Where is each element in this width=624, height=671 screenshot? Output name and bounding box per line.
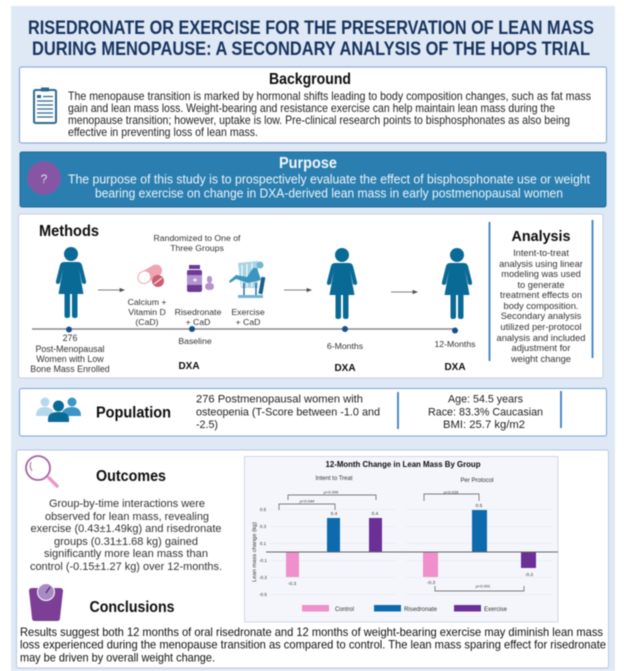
text: timepoint labels: Baseline: [178, 336, 212, 346]
text: population demographics: Race: 83.3% Caucasian: [428, 406, 543, 418]
text: enrolment label: Bone Mass Enrolled: [30, 364, 110, 374]
text: conclusions body: Results suggest both 12 months of oral risedronate and 12 months of weight-bearing exercise may diminish lean mass: [20, 625, 603, 639]
chart legend: Exercise: [484, 607, 508, 613]
arrow: enrolment to randomisation: [98, 288, 124, 292]
arrow: six to twelve months: [391, 290, 417, 294]
text: conclusions body: loss experienced during the menopause transition as compared to control. The lean mass sparing effect for risedronate: [20, 638, 606, 652]
text: group labels: (CaD): [135, 317, 159, 327]
text: analysis body: Intent-to-treat: [513, 248, 569, 258]
text: timepoint labels: 6-Months: [327, 341, 364, 351]
text: analysis body: analysis and included: [497, 333, 585, 343]
text: analysis body: body composition.: [504, 301, 578, 311]
bars: intent to treat: [286, 518, 382, 577]
text: group labels: Calcium +: [128, 297, 166, 307]
icon: woman enrolled: [56, 247, 86, 318]
chart legend: Risedronate: [404, 607, 438, 613]
icon: clipboard: [34, 88, 56, 123]
text: background body: [68, 89, 591, 139]
text: group labels: Risedronate: [175, 307, 222, 317]
icon: weighing scale: [29, 584, 63, 621]
text: analysis body: adjustment for: [512, 343, 570, 353]
panel: population: [20, 388, 606, 436]
text: background body: gain and lean mass loss. Weight-bearing and resistance exercise can help maintain lean mass during the: [68, 101, 555, 115]
text: timepoint labels: 12-Months: [434, 339, 476, 349]
text: enrolment label: Post-Menopausal: [35, 344, 105, 354]
text: analysis body: Secondary analysis: [501, 311, 582, 321]
significance brackets: [279, 494, 524, 591]
text: outcomes body: [30, 498, 222, 573]
text: randomized: [154, 233, 241, 253]
text: timepoint labels: DXA: [178, 361, 200, 372]
icon: woman at six months: [327, 248, 357, 319]
p values: p=0.006: [323, 490, 339, 494]
text: population demographics: BMI: 25.7 kg/m2: [443, 419, 525, 431]
text: analysis body: weight change: [510, 354, 571, 364]
text: analysis body: treatment effects on: [500, 290, 582, 300]
panel: background: [20, 67, 606, 143]
bar value labels: 0.4: [331, 511, 338, 517]
bar value labels: -0.3: [288, 581, 296, 587]
text: timepoint labels: DXA: [334, 363, 356, 374]
timeline: [32, 326, 458, 334]
chart legend: [302, 605, 508, 613]
text: outcomes body: control (-0.15±1.27 kg) over 12-months.: [30, 561, 222, 573]
text: group labels: + CaD: [186, 317, 210, 327]
heading: outcomes: Outcomes: [96, 468, 166, 485]
arrow: randomisation to six months: [284, 288, 311, 292]
text: group labels: Exercise: [231, 307, 265, 317]
panel: outcomes and conclusions: [16, 450, 608, 668]
text: population demographics: Age: 54.5 years: [448, 394, 523, 406]
text: analysis body: modeling was used: [501, 269, 581, 279]
text: purpose body: [68, 172, 590, 200]
text: analysis body: utilized per-protocol: [500, 322, 582, 332]
icon: question mark circle: [27, 161, 61, 195]
title: [28, 18, 594, 60]
chart subtitles: [315, 476, 494, 484]
y axis tick labels: [259, 507, 267, 597]
y axis tick labels: 0.1: [260, 541, 267, 546]
text: analysis body: [497, 248, 585, 364]
bar value labels: 0.4: [372, 511, 379, 517]
bars: per protocol: [423, 510, 536, 577]
y axis tick labels: -0.3: [259, 575, 267, 580]
text: population description: 276 Postmenopausal women with: [196, 394, 363, 406]
chart legend: Control: [335, 607, 354, 613]
panel: purpose: [20, 152, 606, 207]
text: enrolment label: Women with Low: [36, 354, 104, 364]
heading: methods: Methods: [39, 223, 99, 240]
text: outcomes body: groups (0.31±1.68 kg) gained: [54, 536, 198, 548]
heading: background: Background: [269, 71, 351, 88]
text: enrolment label: [30, 333, 110, 374]
text: background body: menopause transition; however, uptake is low. Pre-clinical research points to bisphosphonates as also being: [68, 113, 570, 127]
icon: people group: [36, 398, 81, 422]
icon: question mark circle: ?: [41, 172, 48, 186]
icon: woman at twelve months: [442, 248, 472, 319]
text: conclusions body: [20, 625, 606, 664]
bar value labels: 0.5: [476, 503, 483, 509]
bar value labels: -0.3: [427, 580, 435, 586]
text: outcomes body: Group-by-time interactions were: [49, 498, 205, 510]
chart title: 12-Month Change in Lean Mass By Group: [326, 459, 480, 469]
text: outcomes body: observed for lean mass, revealing: [45, 511, 209, 523]
text: population description: [196, 394, 380, 431]
y axis tick labels: 0.5: [260, 507, 267, 512]
heading: population: Population: [96, 404, 171, 422]
p values: [299, 490, 490, 588]
text: purpose body: bearing exercise on change in DXA-derived lean mass in early postmenopausal women: [95, 186, 563, 200]
heading: analysis: Analysis: [512, 229, 570, 245]
text: group labels: + CaD: [236, 317, 260, 327]
text: conclusions body: may be driven by overall weight change.: [20, 650, 215, 664]
text: group labels: Vitamin D: [128, 307, 166, 317]
y axis tick labels: -0.5: [259, 592, 267, 597]
text: randomized: Randomized to One of: [154, 233, 241, 243]
text: timepoint labels: DXA: [444, 362, 466, 373]
heading: conclusions: Conclusions: [90, 599, 174, 616]
y axis label: Lean mass change (kg): [252, 522, 258, 582]
chart subtitles: Per Protocol: [460, 478, 494, 484]
heading: purpose: Purpose: [279, 155, 337, 172]
text: analysis body: to generate: [517, 280, 565, 290]
p values: p=0.018: [443, 490, 459, 494]
text: analysis body: analysis using linear: [499, 259, 583, 269]
y axis tick labels: 0.3: [260, 524, 267, 529]
text: timepoint labels: [178, 336, 476, 374]
text: background body: effective in preventing loss of lean mass.: [68, 125, 258, 139]
text: randomized: Three Groups: [170, 243, 224, 253]
text: group labels: [128, 297, 265, 327]
icon: risedronate bottle: [187, 265, 214, 292]
divider lines: analysis: [490, 220, 592, 361]
text: purpose body: The purpose of this study is to prospectively evaluate the effect of bisphosphonate use or weight: [68, 172, 590, 186]
icon: calcium pill: [136, 262, 164, 287]
text: population demographics: [428, 394, 543, 431]
p values: p=0.044: [299, 498, 315, 504]
icon: exercise machine: [229, 261, 265, 298]
bar chart: [244, 456, 558, 622]
divider lines: population: [398, 391, 561, 429]
y axis tick labels: -0.1: [259, 558, 267, 563]
text: population description: -2.5): [196, 419, 218, 431]
bar value labels: -0.2: [525, 572, 533, 578]
text: population description: osteopenia (T-Score between -1.0 and: [196, 406, 380, 418]
icon: magnifying glass: [26, 456, 57, 486]
chart subtitles: Intent to Treat: [315, 476, 353, 482]
text: outcomes body: exercise (0.43±1.49kg) and risedronate: [30, 523, 222, 535]
text: enrolment label: 276: [63, 333, 77, 343]
bar value labels: [288, 503, 533, 587]
panel: methods and analysis: [18, 214, 603, 378]
text: outcomes body: significantly more lean mass than: [44, 548, 208, 560]
p values: p=0.001: [475, 584, 490, 588]
